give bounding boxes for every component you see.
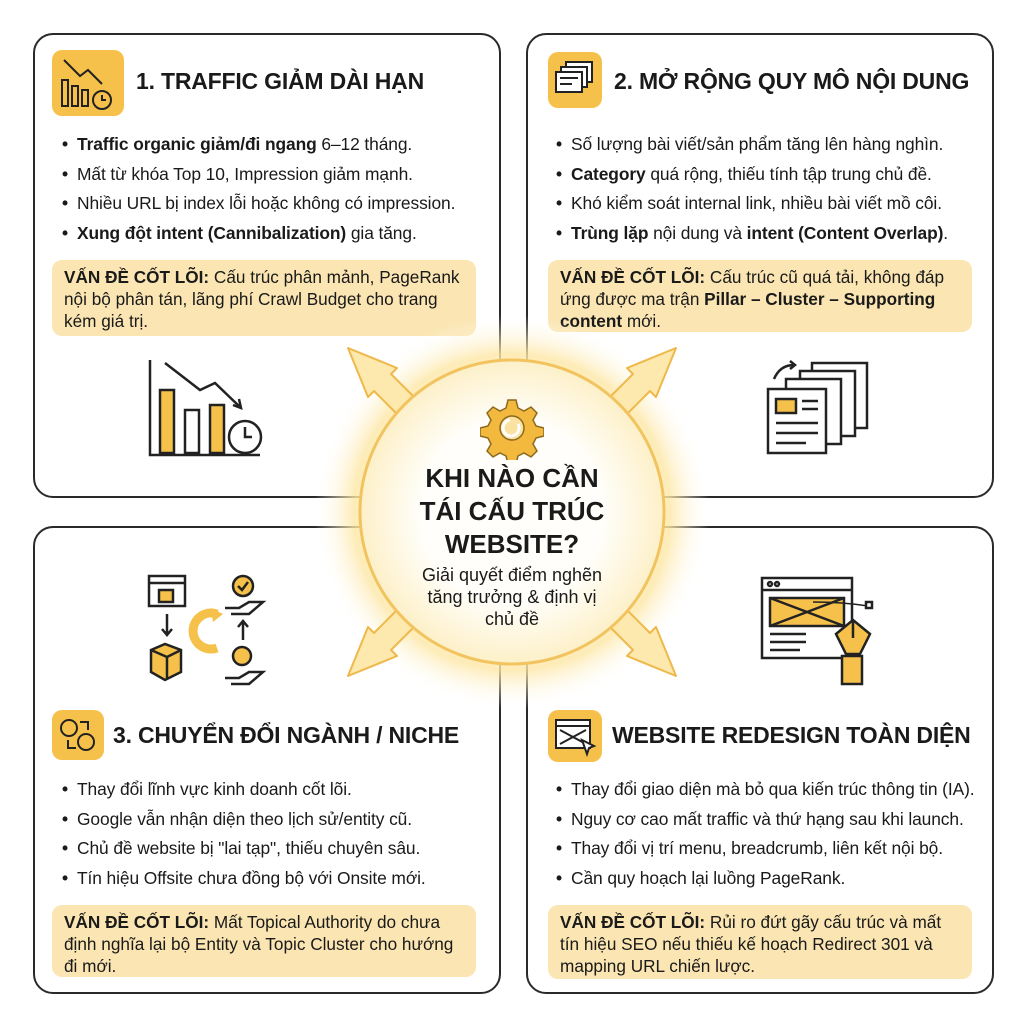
bullets 1: Mất từ khóa Top 10, Impression giảm mạnh. (77, 164, 413, 184)
icon: browser cursor box (548, 710, 602, 762)
heading 1: 1. TRAFFIC GIẢM DÀI HẠN (136, 68, 424, 94)
bullets 2: Số lượng bài viết/sản phẩm tăng lên hàng nghìn. (571, 134, 943, 154)
icon: traffic chart box (52, 50, 124, 116)
illustration: stacked documents (766, 360, 868, 454)
illustration: ecommerce pivot (148, 574, 266, 686)
center title: TÁI CẤU TRÚC (420, 496, 604, 526)
callout 2: VẤN ĐỀ CỐT LÕI: Cấu trúc cũ quá tải, không đáp ứng được ma trận Pillar – Cluster – Supporting content mới. (560, 267, 944, 331)
callout 1: VẤN ĐỀ CỐT LÕI: Cấu trúc phân mảnh, PageRank nội bộ phân tán, lãng phí Crawl Budget cho trang kém giá trị. (64, 267, 459, 331)
center title (420, 463, 604, 559)
heading 4: WEBSITE REDESIGN TOÀN DIỆN (612, 722, 971, 748)
bullets 4: Nguy cơ cao mất traffic và thứ hạng sau khi launch. (571, 808, 964, 828)
bullets 4: Cần quy hoạch lại luồng PageRank. (571, 868, 845, 888)
callout 3: VẤN ĐỀ CỐT LÕI: Mất Topical Authority do chưa định nghĩa lại bộ Entity và Topic Cluster cho hướng đi mới. (64, 912, 453, 976)
bullets 2: Khó kiểm soát internal link, nhiều bài viết mồ côi. (571, 193, 942, 213)
illustration: declining bar chart (148, 360, 262, 456)
bullets 2: Category quá rộng, thiếu tính tập trung chủ đề. (571, 164, 932, 184)
bullets 1 (62, 134, 455, 242)
center subtitle: Giải quyết điểm nghẽn (422, 565, 602, 585)
center subtitle: chủ đề (485, 609, 539, 629)
bullets 1: Traffic organic giảm/đi ngang 6–12 tháng. (77, 134, 412, 154)
illustration: wireframe pen (760, 576, 874, 686)
bullets 2: Trùng lặp nội dung và intent (Content Overlap). (571, 222, 948, 242)
bullets 3 (62, 779, 426, 888)
bullets 4 (556, 779, 975, 888)
icon: users swap box (52, 710, 104, 760)
panel: content scale (526, 33, 994, 498)
icon: content pages box (548, 52, 602, 108)
center title: WEBSITE? (445, 529, 579, 559)
bullets 3: Thay đổi lĩnh vực kinh doanh cốt lõi. (77, 779, 352, 799)
center subtitle: tăng trưởng & định vị (428, 587, 596, 607)
center subtitle (422, 565, 602, 629)
bullets 1: Nhiều URL bị index lỗi hoặc không có impression. (77, 193, 455, 213)
panel: traffic (33, 33, 501, 498)
icon: gear (480, 399, 544, 460)
heading 3: 3. CHUYỂN ĐỔI NGÀNH / NICHE (113, 722, 459, 748)
bullets 3: Tín hiệu Offsite chưa đồng bộ với Onsite mới. (77, 868, 426, 888)
callout 4: VẤN ĐỀ CỐT LÕI: Rủi ro đứt gãy cấu trúc và mất tín hiệu SEO nếu thiếu kế hoạch Redirect 301 và mapping URL chiến lược. (560, 912, 941, 976)
bullets 3: Google vẫn nhận diện theo lịch sử/entity cũ. (77, 808, 412, 828)
center hub with arrows (316, 316, 708, 708)
panel: redesign (526, 526, 994, 994)
center title: KHI NÀO CẦN (425, 463, 599, 493)
bullets 3: Chủ đề website bị "lai tạp", thiếu chuyên sâu. (77, 838, 420, 858)
bullets 1: Xung đột intent (Cannibalization) gia tăng. (77, 222, 417, 242)
bullets 4: Thay đổi giao diện mà bỏ qua kiến trúc thông tin (IA). (571, 779, 975, 799)
heading 2: 2. MỞ RỘNG QUY MÔ NỘI DUNG (614, 68, 969, 94)
bullets 2 (556, 134, 948, 242)
panel: niche (33, 526, 501, 994)
bullets 4: Thay đổi vị trí menu, breadcrumb, liên kết nội bộ. (571, 838, 943, 858)
